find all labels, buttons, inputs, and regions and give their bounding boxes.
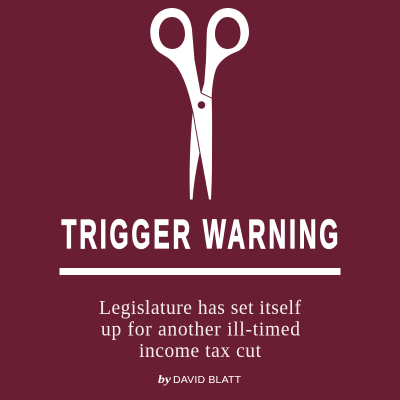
byline: DAVID BLATT [173,374,242,386]
subtitle text: Legislature has set itself [99,298,302,319]
subtitle text: income tax cut [139,341,262,362]
icon: scissors [150,8,249,200]
icon: scissors pivot [198,101,205,109]
subtitle text [99,298,302,362]
byline [158,372,242,386]
byline: by [158,372,172,386]
title: TRIGGER WARNING [62,213,341,258]
divider bar [60,268,340,275]
subtitle text: up for another ill-timed [101,320,300,340]
